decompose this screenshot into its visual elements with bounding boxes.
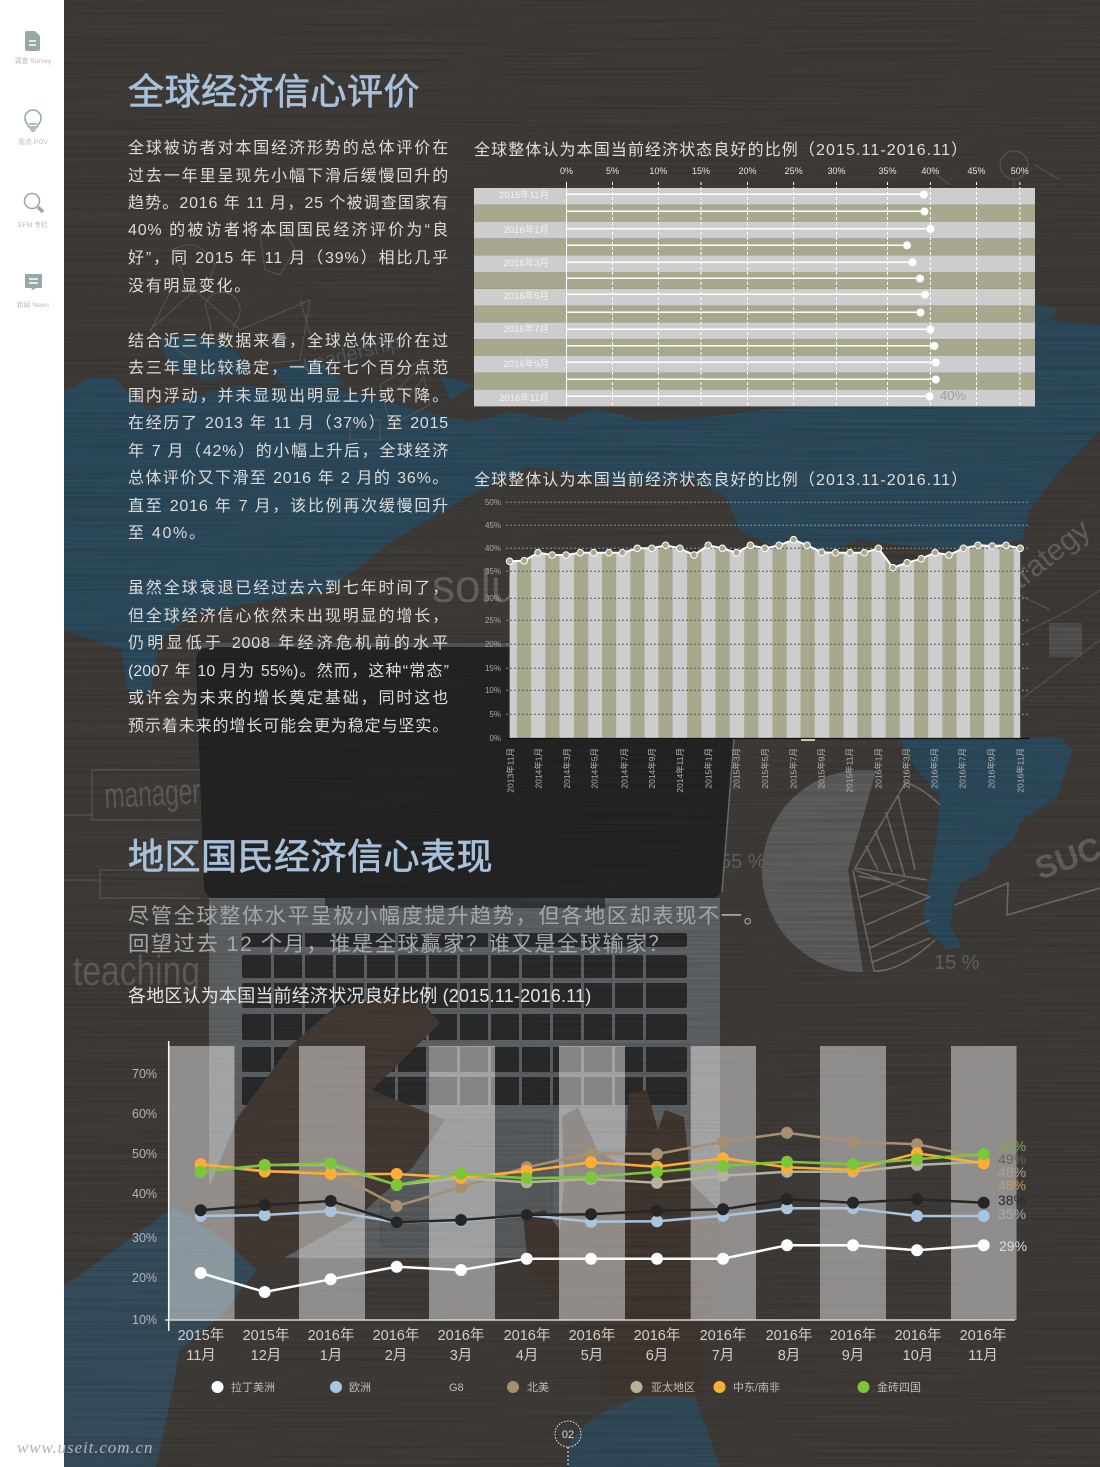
legend: 北美: [527, 1381, 549, 1394]
icon: document: [25, 31, 40, 51]
text: 年 7 月（42%）的小幅上升后，全球经济: [128, 443, 449, 460]
lollipop chart 2015.11-2016.11: 40%: [921, 166, 939, 176]
text: (2007 年 10 月为 55%)。然而，这种“常态”: [128, 663, 449, 680]
subtitle text: [128, 904, 766, 956]
legend: 金砖四国: [877, 1380, 921, 1394]
end-of-line value labels: [998, 1138, 1027, 1254]
text: 在经历了 2013 年 11 月（37%）至 2015: [128, 415, 449, 432]
text: 但全球经济信心依然未出现明显的增长，: [128, 608, 449, 625]
lollipop chart 2015.11-2016.11: 25%: [785, 166, 803, 176]
series: Middle East / South Africa: [195, 1147, 990, 1184]
x-axis labels: 2016年: [569, 1327, 615, 1344]
lollipop chart 2015.11-2016.11: 20%: [738, 166, 757, 176]
striped area line chart 2013.11-2016.11: 30%: [485, 594, 501, 603]
striped area line chart 2013.11-2016.11: 2014年3月: [562, 748, 572, 789]
x-axis labels: 2016年: [830, 1327, 876, 1344]
end-of-line value labels: 49%: [998, 1151, 1026, 1167]
x-axis labels: [178, 1327, 1006, 1364]
background photo: wood desk, world map, laptop and hands: 55 %: [720, 851, 766, 873]
text: 直至 2016 年 7 月，该比例再次缓慢回升: [128, 498, 449, 515]
background photo: wood desk, world map, laptop and hands: trategy: [1004, 513, 1097, 596]
end-of-line value labels: 50%: [998, 1138, 1026, 1154]
lollipop chart 2015.11-2016.11: 45%: [967, 166, 986, 176]
x-axis labels: 2016年: [766, 1327, 812, 1344]
lollipop chart 2015.11-2016.11: 2016年3月: [504, 257, 549, 269]
striped area line chart 2013.11-2016.11: 2014年5月: [590, 748, 600, 789]
legend: 亚太地区: [651, 1381, 695, 1394]
end-of-line value labels: 48%: [998, 1177, 1026, 1193]
legend: 中东/南非: [733, 1381, 780, 1394]
regional line chart: 60%: [132, 1107, 157, 1121]
striped area line chart 2013.11-2016.11: 2016年3月: [902, 748, 912, 789]
heading: global confidence: 全球经济信心评价: [128, 71, 420, 112]
striped area line chart 2013.11-2016.11: 2016年1月: [874, 748, 884, 789]
striped area line chart 2013.11-2016.11: 2015年7月: [788, 748, 798, 789]
lollipop chart 2015.11-2016.11: 40%: [940, 388, 966, 403]
text: 过去一年里呈现先小幅下滑后缓慢回升的: [128, 168, 449, 185]
chart title: 2015-2016: 全球整体认为本国当前经济状态良好的比例（2015.11-2016.11）: [474, 142, 968, 159]
x-axis labels: 2016年: [700, 1327, 746, 1344]
icon: magnifier: [24, 194, 43, 212]
page number: [555, 1421, 581, 1467]
lollipop chart 2015.11-2016.11: 2016年9月: [504, 358, 549, 370]
text: 结合近三年数据来看，全球总体评价在过: [128, 333, 449, 350]
watermark: www.useit.com.cn: [17, 1438, 153, 1457]
x-axis labels: 5月: [581, 1348, 603, 1364]
striped area line chart 2013.11-2016.11: 2016年5月: [930, 748, 940, 789]
background photo: wood desk, world map, laptop and hands: Leadership: [301, 332, 402, 377]
end-of-line value labels: 38%: [998, 1192, 1026, 1208]
striped area line chart 2013.11-2016.11: 15%: [485, 664, 501, 673]
x-axis labels: 2016年: [308, 1327, 354, 1344]
x-axis labels: 2016年: [960, 1327, 1006, 1344]
sidebar navigation: [14, 31, 52, 309]
lollipop chart 2015.11-2016.11: 2016年11月: [499, 392, 549, 404]
text: 好”，同 2015 年 11 月（39%）相比几乎: [128, 250, 449, 267]
end-of-line value labels: 35%: [998, 1206, 1026, 1222]
lollipop chart 2015.11-2016.11: 30%: [827, 166, 846, 176]
striped area line chart 2013.11-2016.11: 0%: [489, 734, 501, 743]
striped area line chart 2013.11-2016.11: 45%: [485, 521, 501, 530]
legend: [212, 1380, 921, 1394]
striped area line chart 2013.11-2016.11: 5%: [489, 710, 501, 719]
x-axis labels: 2016年: [438, 1327, 484, 1344]
legend: 拉丁美洲: [231, 1380, 275, 1394]
x-axis labels: 11月: [968, 1348, 998, 1364]
striped area line chart 2013.11-2016.11: [485, 498, 1030, 793]
lollipop chart 2015.11-2016.11: 0%: [560, 166, 573, 176]
legend: 欧洲: [349, 1381, 371, 1394]
text: 总体评价又下滑至 2016 年 2 月的 36%。: [128, 470, 449, 487]
icon: light bulb: [25, 110, 41, 131]
x-axis labels: 2016年: [895, 1327, 941, 1344]
striped area line chart 2013.11-2016.11: 2014年1月: [534, 748, 544, 789]
end-of-line value labels: 29%: [999, 1238, 1027, 1254]
x-axis labels: 2月: [385, 1348, 407, 1364]
lollipop chart 2015.11-2016.11: 2016年5月: [504, 290, 549, 302]
striped area line chart 2013.11-2016.11: 2016年9月: [987, 748, 997, 789]
text: 40% 的被访者将本国国民经济评价为“良: [128, 222, 449, 239]
series: North America: [195, 1127, 990, 1212]
regional line chart: 30%: [132, 1231, 157, 1245]
text: 虽然全球衰退已经过去六到七年时间了，: [128, 580, 449, 597]
label: news: 新闻 News: [17, 300, 50, 309]
striped area line chart 2013.11-2016.11: 40%: [485, 544, 501, 553]
text: 或许会为未来的增长奠定基础，同时这也: [128, 690, 449, 707]
background photo: wood desk, world map, laptop and hands: teaching: [73, 947, 200, 994]
striped area line chart 2013.11-2016.11: 25%: [485, 616, 501, 625]
lollipop chart 2015.11-2016.11: [474, 166, 1035, 406]
x-axis labels: 12月: [251, 1348, 281, 1364]
x-axis labels: 2016年: [504, 1327, 550, 1344]
label: viewpoint: 观点 POV: [18, 138, 48, 146]
text: 趋势。2016 年 11 月，25 个被调查国家有: [128, 195, 449, 212]
x-axis labels: 2016年: [373, 1327, 419, 1344]
lollipop chart 2015.11-2016.11: 2015年11月: [499, 189, 549, 201]
series: Latin America: [195, 1239, 990, 1298]
regional line chart: 70%: [132, 1067, 157, 1081]
striped area line chart 2013.11-2016.11: 2014年7月: [620, 748, 630, 789]
x-axis labels: 2016年: [634, 1327, 680, 1344]
lollipop chart 2015.11-2016.11: 2016年1月: [504, 224, 549, 236]
icon: speech bubble: [25, 274, 42, 290]
x-axis labels: 4月: [516, 1348, 538, 1364]
striped area line chart 2013.11-2016.11: 20%: [485, 640, 501, 649]
striped area line chart 2013.11-2016.11: 2014年11月: [675, 748, 685, 793]
x-axis labels: 8月: [778, 1348, 800, 1364]
series: Asia Pacific: [195, 1156, 990, 1191]
x-axis labels: 3月: [450, 1348, 472, 1364]
text: 至 40%。: [128, 525, 207, 542]
text: 仍明显低于 2008 年经济危机前的水平: [128, 635, 449, 652]
x-axis labels: 1月: [320, 1348, 342, 1364]
striped area line chart 2013.11-2016.11: 2015年1月: [704, 748, 714, 789]
striped area line chart 2013.11-2016.11: 2014年9月: [647, 748, 657, 789]
lollipop chart 2015.11-2016.11: 50%: [1011, 166, 1029, 176]
end-of-line value labels: 48%: [998, 1164, 1026, 1180]
text: 全球被访者对本国经济形势的总体评价在: [128, 140, 449, 157]
series: Europe: [195, 1202, 990, 1228]
striped area line chart 2013.11-2016.11: 2015年5月: [760, 748, 770, 789]
striped area line chart 2013.11-2016.11: 10%: [485, 686, 501, 695]
heading: regional confidence: 地区国民经济信心表现: [128, 836, 493, 877]
background photo: wood desk, world map, laptop and hands: 15 %: [934, 952, 980, 974]
regional line chart: 10%: [132, 1313, 157, 1327]
label: column: EFM 专栏: [18, 220, 48, 229]
x-axis labels: 7月: [712, 1348, 734, 1364]
regional line chart: 50%: [132, 1147, 157, 1161]
striped area line chart 2013.11-2016.11: 35%: [485, 567, 501, 576]
text: 预示着未来的增长可能会更为稳定与坚实。: [128, 718, 449, 735]
striped area line chart 2013.11-2016.11: 2016年7月: [958, 748, 968, 789]
lollipop chart 2015.11-2016.11: 15%: [692, 166, 710, 176]
subtitle text: 尽管全球整体水平呈极小幅度提升趋势，但各地区却表现不一。: [128, 904, 766, 928]
lollipop chart 2015.11-2016.11: 10%: [649, 166, 667, 176]
text: 没有明显变化。: [128, 278, 252, 295]
x-axis labels: 2015年: [243, 1327, 289, 1344]
x-axis labels: 6月: [646, 1348, 668, 1364]
striped area line chart 2013.11-2016.11: 2015年9月: [816, 748, 826, 789]
page number: 02: [562, 1429, 574, 1441]
striped area line chart 2013.11-2016.11: 50%: [485, 498, 501, 507]
series: BRICS: [195, 1148, 990, 1191]
subtitle text: 回望过去 12 个月，谁是全球赢家？谁又是全球输家？: [128, 932, 671, 956]
regional line chart: 40%: [132, 1187, 157, 1201]
lollipop chart 2015.11-2016.11: 5%: [606, 166, 619, 176]
x-axis labels: 2015年: [178, 1327, 224, 1344]
striped area line chart 2013.11-2016.11: 2015年11月: [845, 748, 855, 793]
lollipop chart 2015.11-2016.11: 2016年7月: [504, 323, 549, 335]
chart title: regions: 各地区认为本国当前经济状况良好比例 (2015.11-2016.11): [128, 986, 591, 1006]
body text: [128, 139, 449, 735]
lollipop chart 2015.11-2016.11: 35%: [878, 166, 897, 176]
x-axis labels: 11月: [186, 1348, 216, 1364]
series: G8: [195, 1193, 990, 1228]
background photo: wood desk, world map, laptop and hands: solu: [432, 560, 516, 612]
chart title: 2013-2016: 全球整体认为本国当前经济状态良好的比例（2013.11-2016.11）: [474, 472, 968, 489]
striped area line chart 2013.11-2016.11: 2016年11月: [1016, 748, 1026, 793]
striped area line chart 2013.11-2016.11: 2015年3月: [732, 748, 742, 789]
text: 围内浮动，并未显现出明显上升或下降。: [128, 388, 449, 405]
x-axis labels: 9月: [842, 1348, 864, 1364]
label: survey: 调查 Survey: [15, 56, 52, 65]
x-axis labels: 10月: [903, 1348, 933, 1364]
regional line chart: 20%: [132, 1271, 157, 1285]
striped area line chart 2013.11-2016.11: 2013年11月: [506, 748, 516, 793]
text: 去三年里比较稳定，一直在七个百分点范: [128, 360, 449, 377]
background photo: wood desk, world map, laptop and hands: manager: [103, 770, 201, 816]
legend: G8: [449, 1382, 464, 1394]
